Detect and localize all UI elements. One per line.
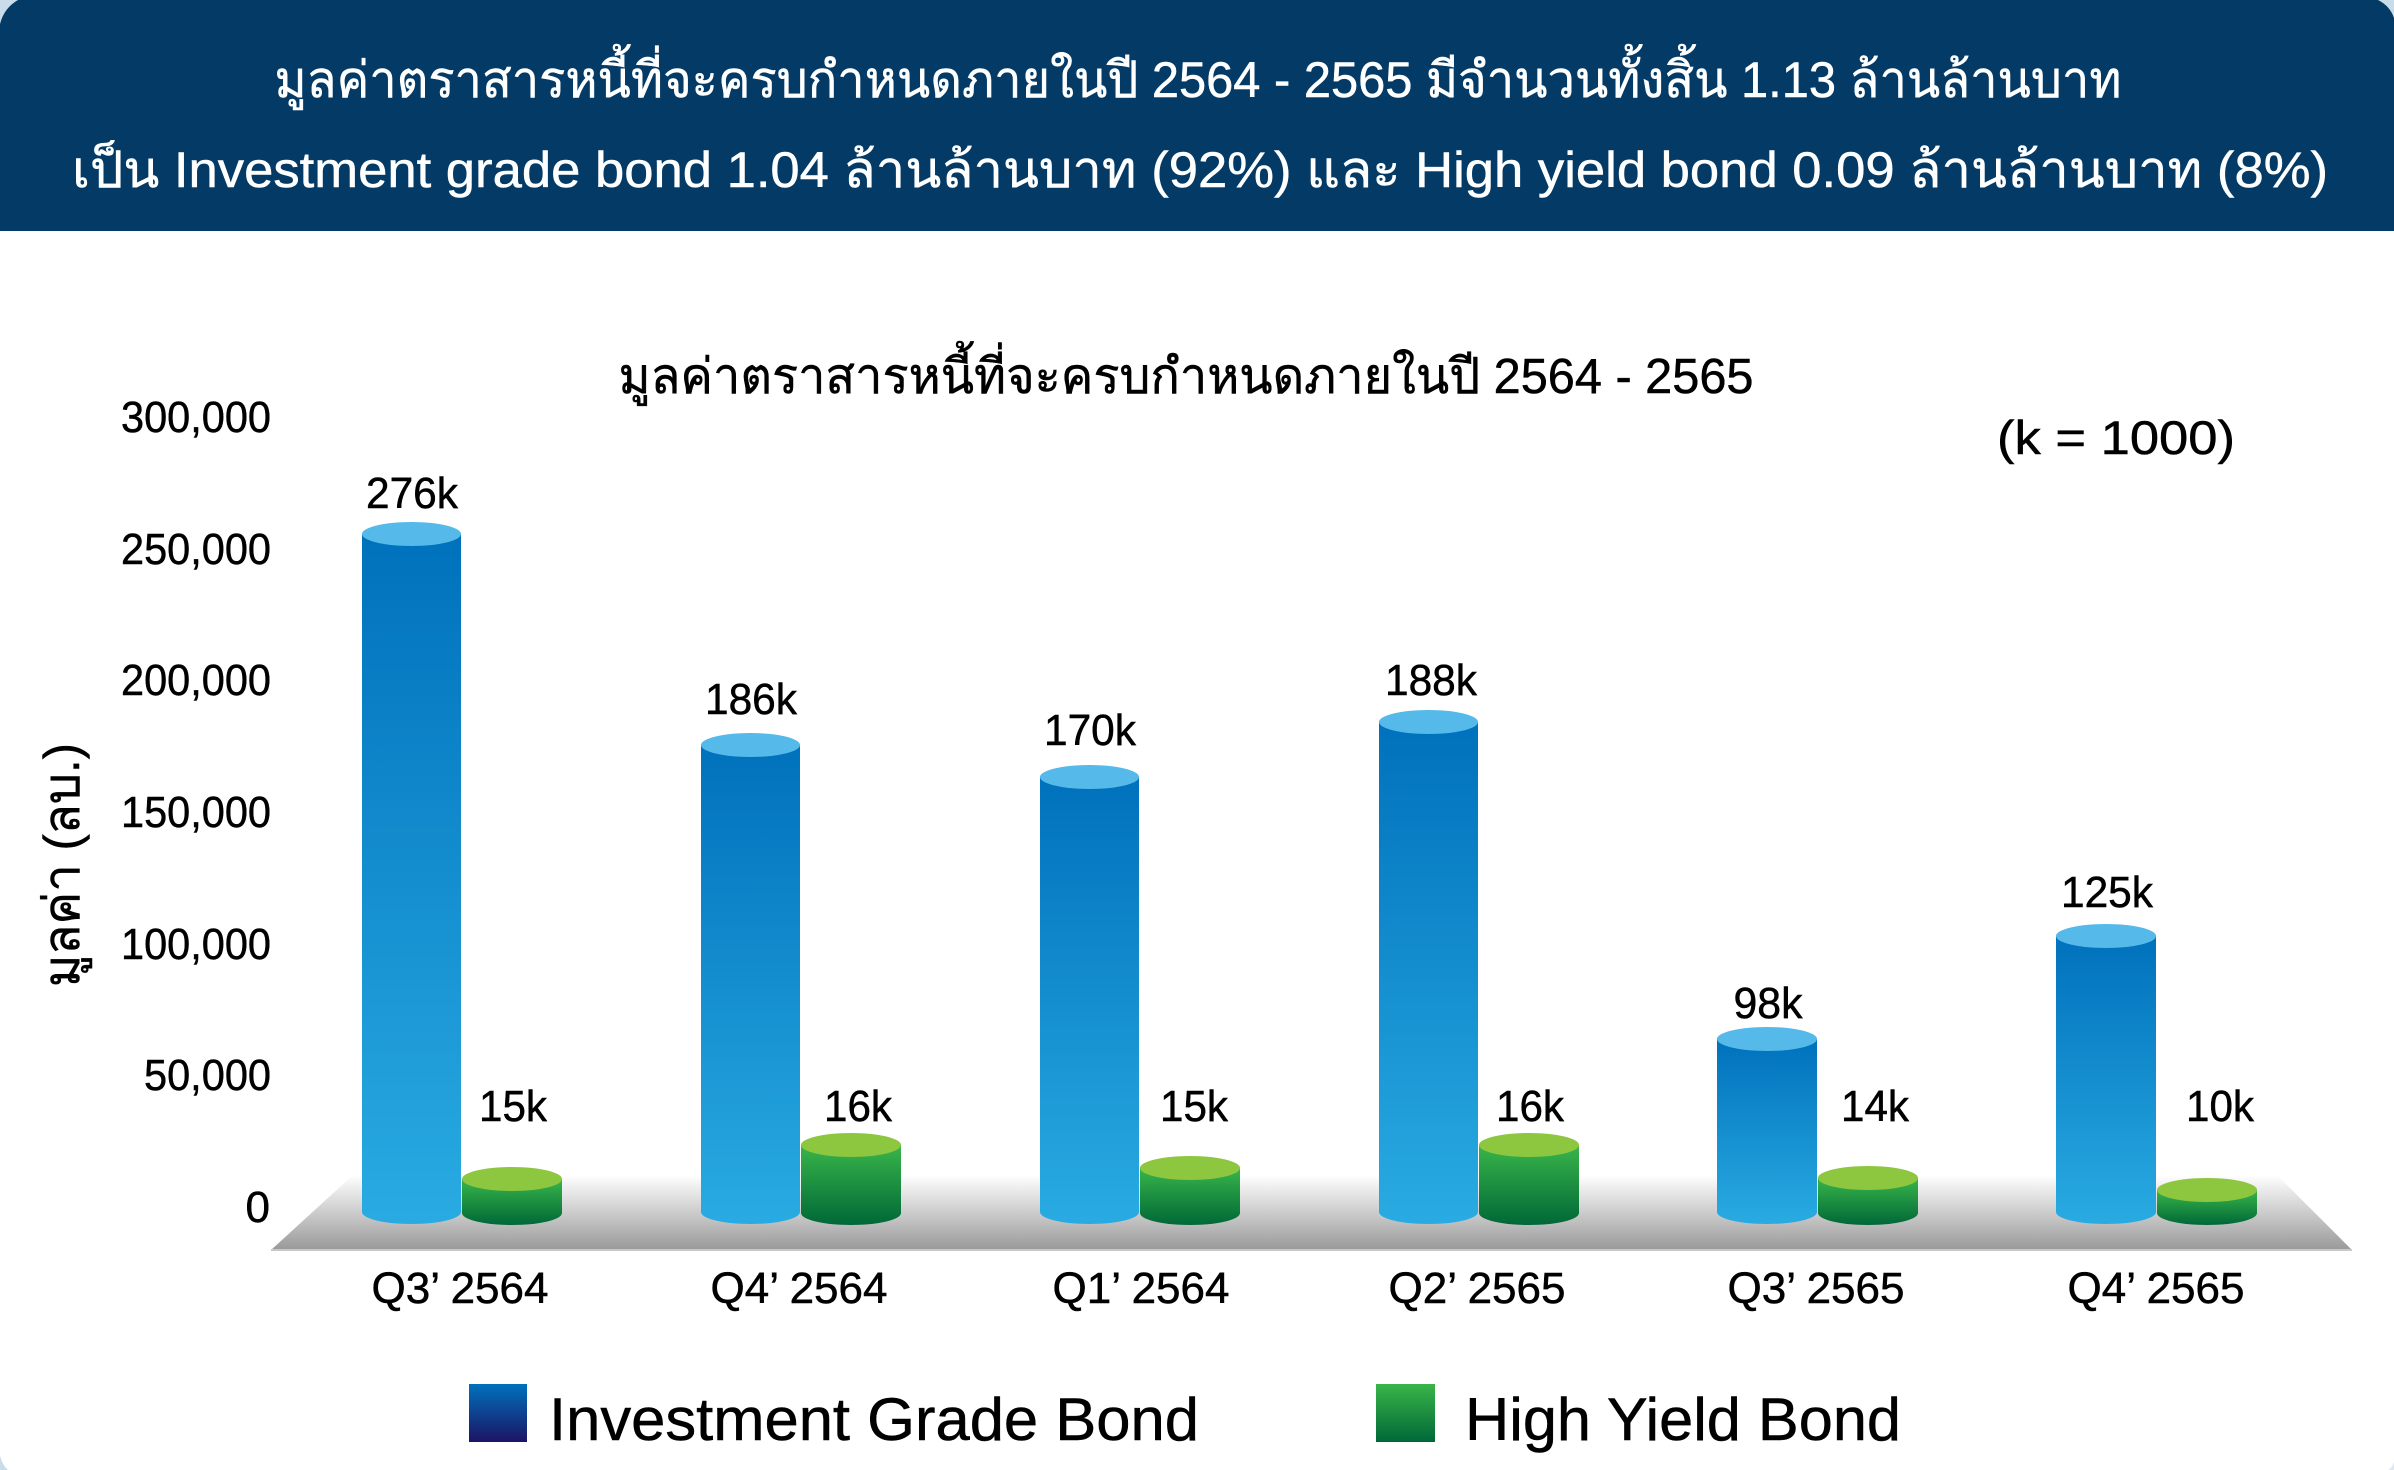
legend swatch: high yield	[1376, 1384, 1435, 1442]
y axis labels: 0	[246, 1183, 270, 1232]
data labels: 15k	[479, 1082, 548, 1131]
data labels	[366, 469, 2255, 1131]
headline line 2: เป็น Investment grade bond 1.04 ล้านล้านบาท (92%) และ High yield bond 0.09 ล้านล้านบาท (8%)	[72, 140, 2328, 198]
high yield bar 15k	[462, 1167, 562, 1225]
high yield bar 14k	[1818, 1166, 1918, 1225]
data labels: 10k	[2186, 1082, 2255, 1131]
bars: Q4 2565	[2056, 924, 2257, 1225]
legend	[469, 1384, 1901, 1453]
data labels: 16k	[824, 1082, 893, 1131]
y axis labels: 50,000	[144, 1051, 271, 1100]
legend label: investment grade: Investment Grade Bond	[549, 1386, 1199, 1453]
bars: Q4 2564	[701, 733, 901, 1225]
data labels: 276k	[366, 469, 459, 518]
x axis labels	[372, 1264, 2244, 1313]
legend label: high yield: High Yield Bond	[1465, 1386, 1901, 1453]
data labels: 14k	[1841, 1082, 1910, 1131]
bars: Q2 2565	[1379, 710, 1579, 1225]
high yield bar 15k	[1140, 1156, 1240, 1225]
investment grade bar 125k	[2056, 924, 2156, 1224]
x axis labels: Q2’ 2565	[1388, 1264, 1566, 1313]
high yield bar 16k	[801, 1133, 901, 1225]
investment grade bar 98k	[1717, 1027, 1817, 1224]
y axis title: มูลค่า (ลบ.)	[34, 743, 92, 987]
y axis labels: 300,000	[121, 393, 271, 442]
legend swatch: investment grade	[469, 1384, 527, 1442]
high yield bar 16k	[1479, 1133, 1579, 1225]
bars: Q3 2565	[1717, 1027, 1918, 1225]
investment grade bar 188k	[1379, 710, 1478, 1224]
bars: Q1 2564	[1040, 765, 1240, 1225]
y axis labels	[121, 393, 271, 1232]
data labels: 16k	[1496, 1082, 1565, 1131]
y axis labels: 200,000	[121, 656, 271, 705]
data labels: 98k	[1734, 979, 1803, 1028]
data labels: 186k	[705, 675, 798, 724]
headline line 1: มูลค่าตราสารหนี้ที่จะครบกำหนดภายในปี 2564 - 2565 มีจำนวนทั้งสิ้น 1.13 ล้านล้านบาท	[274, 44, 2122, 110]
chart floor	[271, 1175, 2352, 1251]
data labels: 170k	[1044, 706, 1137, 755]
investment grade bar 186k	[701, 733, 800, 1224]
y axis labels: 100,000	[121, 920, 271, 969]
high yield bar 10k	[2157, 1178, 2257, 1225]
x axis labels: Q3’ 2564	[372, 1264, 548, 1313]
x axis labels: Q4’ 2565	[2068, 1264, 2244, 1313]
data labels: 15k	[1160, 1082, 1229, 1131]
data labels: 188k	[1385, 656, 1478, 705]
chart title: มูลค่าตราสารหนี้ที่จะครบกำหนดภายในปี 2564 - 2565	[618, 341, 1754, 406]
bars: Q3 2564	[362, 522, 562, 1225]
page corner accents	[0, 1456, 2394, 1470]
investment grade bar 170k	[1040, 765, 1139, 1224]
x axis labels: Q1’ 2564	[1052, 1264, 1230, 1313]
data labels: 125k	[2061, 868, 2154, 917]
x axis labels: Q3’ 2565	[1728, 1264, 1904, 1313]
x axis labels: Q4’ 2564	[710, 1264, 888, 1313]
investment grade bar 276k	[362, 522, 461, 1224]
y axis labels: 150,000	[121, 788, 271, 837]
unit note: (k = 1000)	[1997, 411, 2235, 464]
header banner	[0, 0, 2394, 231]
y axis labels: 250,000	[121, 525, 271, 574]
